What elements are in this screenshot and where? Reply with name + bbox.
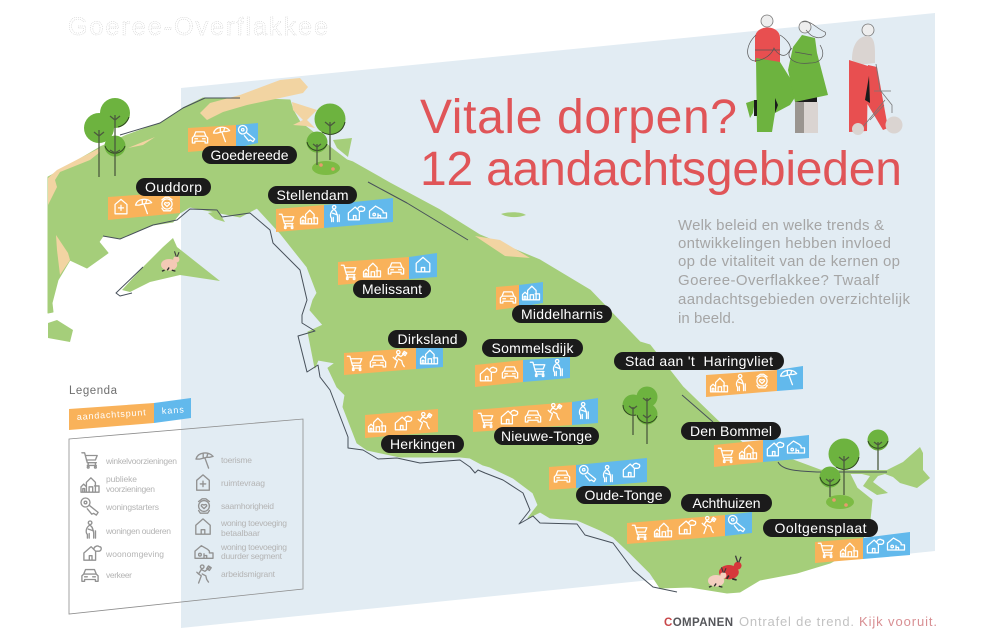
item: verkeer <box>82 570 132 581</box>
text block: intro: op de vitaliteit van de kernen op <box>678 253 900 270</box>
land: south-west fragment <box>48 320 73 342</box>
chip: aandachtspunt <box>549 465 576 490</box>
village: Melissant <box>338 253 437 298</box>
text block: intro: ontwikkelingen hebben invloed <box>678 235 891 252</box>
land: main island <box>48 98 872 593</box>
text block: intro: in beeld. <box>678 310 735 327</box>
legend box <box>69 419 303 614</box>
icon: community <box>162 197 172 211</box>
legend key: kans: kans <box>161 404 185 416</box>
legend heading: Legenda <box>69 385 118 397</box>
item: arbeidsmigrant: arbeidsmigrant <box>221 569 276 579</box>
coastline: den bommel <box>682 395 713 422</box>
chip: aandachtspunt <box>365 409 438 438</box>
land: small islets <box>208 138 526 222</box>
figure: man <box>746 15 800 132</box>
label: Achthuizen <box>692 495 760 511</box>
icon: elderly <box>603 466 612 482</box>
icon: cart <box>347 356 362 371</box>
sand: western beach <box>48 148 100 205</box>
item: saamhorigheid <box>199 499 274 513</box>
label: Stad aan 't Haringvliet <box>625 353 773 369</box>
chip: kans <box>725 512 752 536</box>
sand: coast strip <box>128 137 530 258</box>
sand: lower west beach <box>56 235 70 275</box>
label: Stellendam <box>276 187 348 203</box>
icon: cart <box>818 543 833 558</box>
icon: elderly <box>553 360 562 376</box>
chip: aandachtspunt <box>706 370 777 397</box>
chip: aandachtspunt <box>276 205 324 232</box>
icon: public <box>522 286 540 300</box>
icon: migrant <box>702 516 716 534</box>
village: Stad aan 't Haringvliet <box>614 352 803 397</box>
icon: migrant <box>418 412 432 430</box>
item: woning toevoeging betaalbaar: betaalbaar <box>221 528 260 538</box>
village: Sommelsdijk <box>475 339 583 387</box>
icon: living environment <box>679 520 696 534</box>
icon: cart <box>341 265 356 280</box>
item: woning toevoeging duurder segment <box>195 542 287 561</box>
item: winkelvoorzieningen <box>82 453 177 468</box>
footer: Companen logo and slogan: Ontrafel de trend. <box>739 614 854 629</box>
icon: elderly <box>736 374 745 391</box>
chip: kans <box>409 253 437 279</box>
item: woningen ouderen <box>86 521 171 538</box>
icon: car <box>500 292 516 303</box>
label: Den Bommel <box>690 423 772 439</box>
icon: house <box>416 257 430 272</box>
item: winkelvoorzieningen: winkelvoorzieningen <box>105 456 177 466</box>
figure: person with walker <box>849 24 902 135</box>
title: Vitale dorpen? <box>420 91 737 144</box>
item: woning toevoeging duurder segment: woning toevoeging <box>220 542 287 552</box>
text block: intro: Goeree-Overflakkee? Twaalf <box>678 272 880 289</box>
label: Oude-Tonge <box>584 487 663 503</box>
icon: living environment <box>623 463 640 477</box>
item: woningen ouderen: woningen ouderen <box>105 526 171 536</box>
icon: key <box>580 466 596 482</box>
icon: pink rabbit <box>708 567 726 587</box>
legend <box>69 385 303 614</box>
icon: cart <box>718 448 733 463</box>
label: Goedereede <box>210 147 289 163</box>
title: 12 aandachtsgebieden <box>420 143 902 196</box>
chip: aandachtspunt <box>815 538 863 563</box>
figure: woman <box>788 21 828 133</box>
heading: region name: Goeree-Overflakkee <box>68 13 328 41</box>
label: Sommelsdijk <box>492 340 574 356</box>
chip: aandachtspunt <box>188 125 236 152</box>
icon: living environment <box>480 367 497 381</box>
icon: migrant <box>548 404 562 420</box>
item: woning toevoeging betaalbaar: woning toevoeging <box>220 518 287 528</box>
village: Achthuizen <box>627 494 772 544</box>
sand: northern dunes <box>200 78 308 120</box>
map: Goeree-Overflakkee <box>48 78 930 593</box>
coastline: north dike <box>368 182 468 240</box>
item: arbeidsmigrant <box>197 565 276 583</box>
icon: public <box>300 210 318 224</box>
item: woningstarters <box>81 498 159 515</box>
icon: public <box>840 543 858 557</box>
text block: intro: aandachtsgebieden overzichtelijk <box>678 291 910 308</box>
icon: upmarket house <box>888 538 904 550</box>
title <box>420 91 902 196</box>
coastline: north-west <box>120 98 240 135</box>
chip: kans <box>324 198 393 228</box>
icon: migrant <box>393 350 407 368</box>
legend key: kans <box>154 398 191 423</box>
item: saamhorigheid: saamhorigheid <box>221 501 274 511</box>
item: woning toevoeging betaalbaar <box>196 518 287 538</box>
icon: cart <box>530 362 545 377</box>
item: publieke voorzieningen: voorzieningen <box>106 484 155 494</box>
icon: upmarket house <box>788 441 804 453</box>
item: woonomgeving <box>84 546 164 560</box>
chip: kans <box>523 357 570 382</box>
icon: public <box>420 350 438 364</box>
item: woonomgeving: woonomgeving <box>105 549 164 559</box>
icon: extra space <box>115 199 127 214</box>
icon: public <box>654 523 672 537</box>
chip: aandachtspunt <box>627 515 725 544</box>
label: Ooltgensplaat <box>774 520 867 536</box>
text block: intro <box>678 217 910 327</box>
icon: elderly <box>330 206 339 222</box>
illustration: elderly people <box>746 15 902 135</box>
village: Dirksland <box>344 330 467 375</box>
item: publieke voorzieningen <box>81 474 155 494</box>
chip: kans <box>777 366 803 391</box>
sand: eastern dune <box>292 102 317 128</box>
village: Herkingen <box>365 409 464 453</box>
coastline: south dike <box>103 209 677 592</box>
village: Nieuwe-Tonge <box>473 398 599 445</box>
chip: kans <box>863 532 910 559</box>
chip: kans <box>763 435 809 462</box>
legend key: aandachtspunt: aandachtspunt <box>76 407 146 422</box>
chip: kans <box>576 458 647 488</box>
icon: public <box>740 445 756 459</box>
footer: Companen logo and slogan <box>664 614 937 629</box>
chip: kans <box>572 398 598 425</box>
trees: Nieuwe-Tonge <box>622 386 658 444</box>
label: Middelharnis <box>521 306 603 322</box>
item: toerisme: toerisme <box>221 455 252 465</box>
icon: car <box>525 411 541 422</box>
chip: aandachtspunt <box>714 440 763 467</box>
item: ruimtevraag <box>197 475 265 490</box>
footer: Companen logo and slogan: Kijk vooruit. <box>859 614 937 629</box>
item: toerisme <box>196 453 252 468</box>
icon: public <box>710 378 728 392</box>
label: Ouddorp <box>145 179 202 195</box>
icon: cart <box>632 525 647 540</box>
legend key: aandachtspunt <box>69 403 154 430</box>
item: publieke voorzieningen: publieke <box>106 474 137 484</box>
icon: living environment <box>348 206 365 220</box>
coastline: east dike <box>778 462 887 472</box>
village: Goedereede <box>188 123 297 164</box>
coastline: bird island <box>116 267 143 296</box>
icon: cart <box>279 214 294 229</box>
label: Herkingen <box>390 436 455 452</box>
label <box>681 494 772 512</box>
label: Nieuwe-Tonge <box>501 428 592 444</box>
chip: aandachtspunt <box>344 348 416 375</box>
icon: car <box>192 132 208 143</box>
land: east peninsula <box>820 447 930 495</box>
icon: upmarket house <box>370 206 386 218</box>
icon: public <box>368 418 386 432</box>
icon: elderly <box>579 402 588 419</box>
icon: umbrella <box>136 199 152 214</box>
icon: umbrella <box>780 370 797 385</box>
icon: community <box>757 374 767 388</box>
background water panel <box>181 13 935 628</box>
icon: car <box>502 367 518 378</box>
footer: Companen logo and slogan: COMPANEN <box>664 617 733 629</box>
icon: public <box>364 263 380 277</box>
trees: north-west <box>84 98 130 177</box>
icon: living environment <box>767 442 784 456</box>
label: Melissant <box>362 281 422 297</box>
icon: cart <box>478 413 493 428</box>
item: ruimtevraag: ruimtevraag <box>221 478 265 488</box>
item: woning toevoeging duurder segment: duurder segment <box>221 551 283 561</box>
icon: living environment <box>395 416 412 430</box>
icon: car <box>388 263 404 274</box>
chip: kans <box>236 123 258 148</box>
label: Dirksland <box>398 331 458 347</box>
item: woningstarters: woningstarters <box>105 502 159 512</box>
chip: aandachtspunt <box>496 285 519 310</box>
land: bird island <box>122 238 220 292</box>
icon: living environment <box>867 539 884 553</box>
icon: umbrella <box>214 127 230 142</box>
icon: pink rabbit on bird island <box>161 251 179 271</box>
icon: red rabbit <box>719 556 742 580</box>
trees: Stellendam <box>306 104 346 175</box>
trees: Ooltgensplaat <box>820 430 888 509</box>
village: Stellendam <box>268 186 393 232</box>
village: Ooltgensplaat <box>763 519 910 563</box>
chip: kans <box>416 346 443 369</box>
item: verkeer: verkeer <box>106 570 132 580</box>
chip: aandachtspunt <box>108 192 180 220</box>
chip: aandachtspunt <box>473 402 572 432</box>
icon: car <box>554 471 570 482</box>
village: Den Bommel <box>681 422 809 467</box>
icon: key <box>728 516 745 532</box>
village: Oude-Tonge <box>549 458 671 504</box>
icon: living environment <box>501 410 518 424</box>
text block: intro: Welk beleid en welke trends & <box>678 217 884 234</box>
village: Middelharnis <box>496 282 612 323</box>
chip: aandachtspunt <box>475 360 523 387</box>
chip: aandachtspunt <box>338 257 409 285</box>
icon: key <box>238 126 255 142</box>
village: Ouddorp <box>108 178 211 220</box>
icon: car <box>370 356 386 367</box>
chip: kans <box>519 282 543 307</box>
